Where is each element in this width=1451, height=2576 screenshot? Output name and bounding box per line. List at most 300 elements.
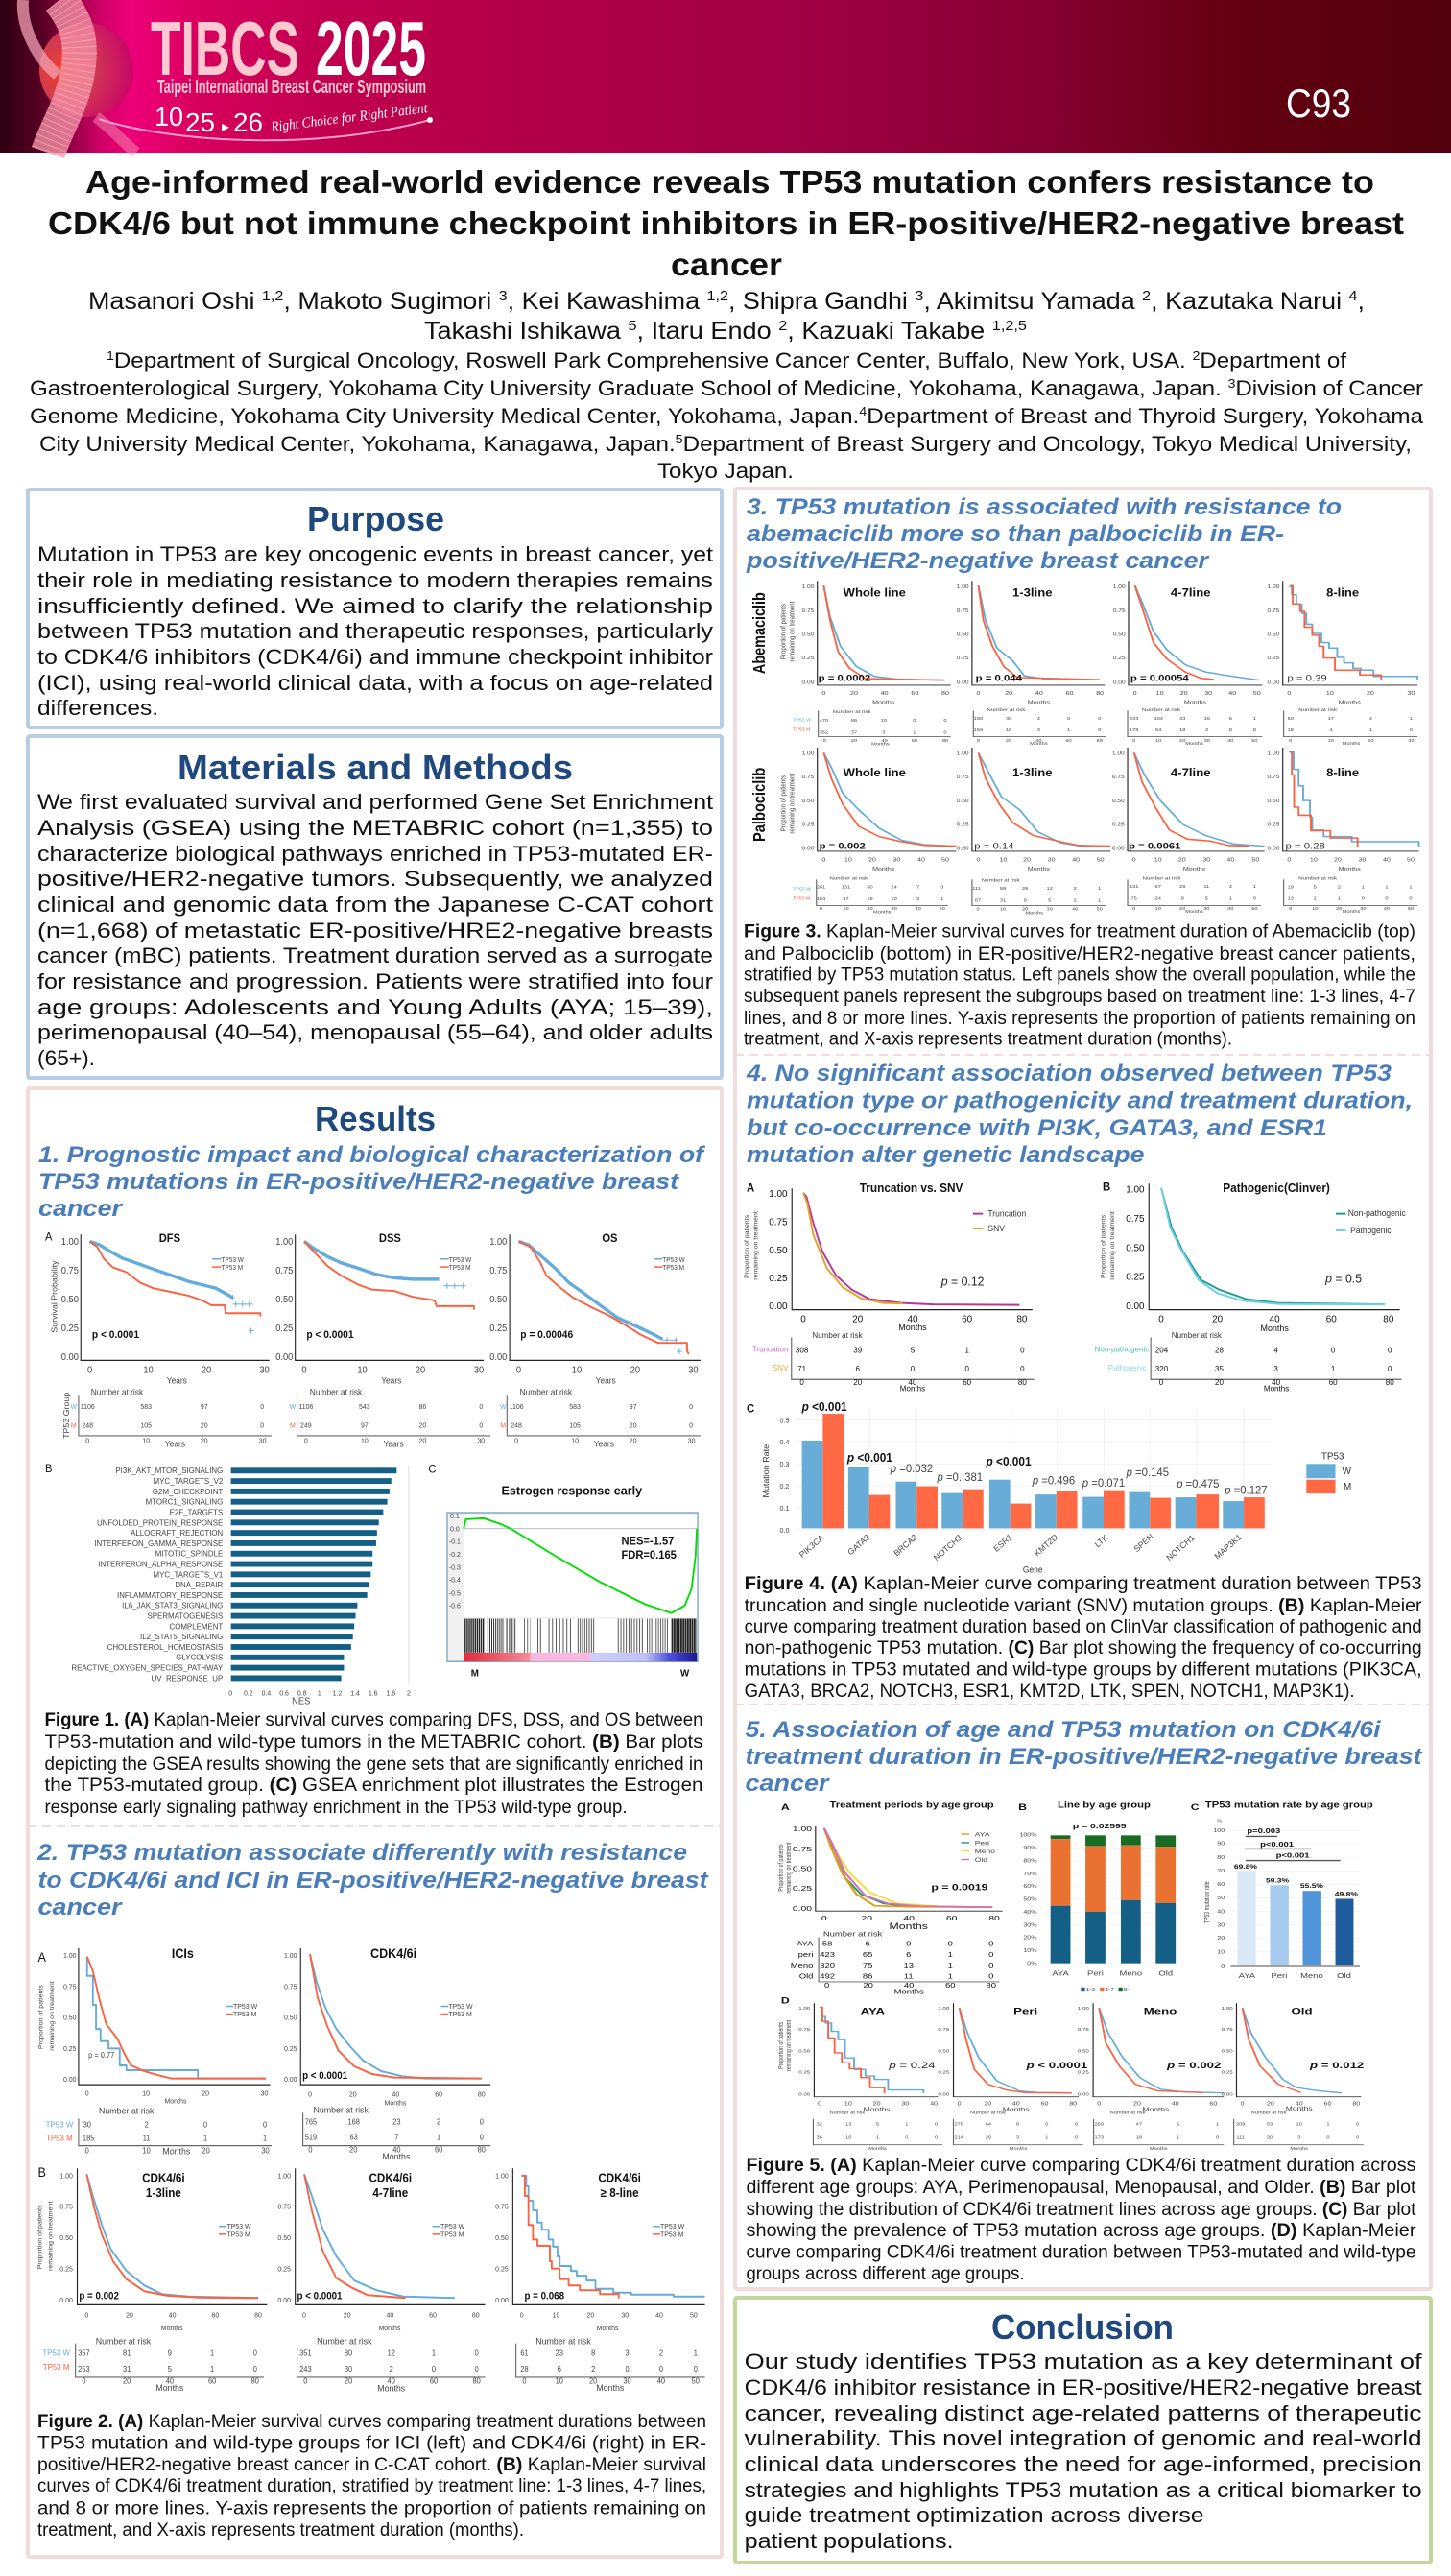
figure 1B: GSEA bar chart: SPERMATOGENESIS	[148, 1611, 224, 1621]
figure 5A: treatment periods by age: 0.00	[793, 1904, 812, 1913]
text: conclusion body: clinical data underscores the need for age-informed, precision	[745, 2452, 1422, 2476]
figure 5D: Meno: Months	[1150, 2147, 1168, 2152]
figure 4C: co-mutation bar chart: p =0. 381	[937, 1471, 983, 1484]
figure 5D: Meno: 259	[1095, 2122, 1104, 2127]
figure 5D: Old: 0	[1241, 2101, 1245, 2107]
figure 5D: AYA: 0.50	[798, 2049, 810, 2054]
figure 3: abemaciclib 8 line: 4	[1329, 728, 1333, 733]
figure 2B: CDK4/6i 8+ line: 3	[625, 2349, 630, 2358]
figure 5A: treatment periods by age: Meno	[975, 1848, 995, 1855]
figure 3: abemaciclib 1-3 line: 0.75	[957, 608, 969, 614]
figure 5D: Meno: 0.50	[1078, 2049, 1089, 2054]
figure 5D: Peri: 80	[1069, 2101, 1078, 2107]
figure 4C: co-mutation bar chart: ESR1	[991, 1532, 1014, 1554]
figure 2B: CDK4/6i 1-3 line: 60	[208, 2376, 216, 2386]
figure 3: abemaciclib 4-7 line: p = 0.00054	[1130, 674, 1189, 683]
figure 2A: ICIs: Number at risk	[99, 2106, 155, 2115]
figure 4B: pathogenic: 80	[1386, 1378, 1394, 1387]
icon: globe	[39, 23, 133, 117]
figure 5B: line by age group: 20%	[1023, 1935, 1037, 1941]
figure 2A: CDK4/6i: CDK4/6i	[370, 1946, 416, 1961]
figure 3: palbociclib 1-3 line: 1-3line	[1012, 767, 1053, 779]
figure 1A: DFS survival: 10	[143, 1365, 154, 1376]
figure 3: abemaciclib 8 line: 0.25	[1268, 656, 1280, 661]
figure 3	[749, 581, 1419, 916]
figure 4A: truncation vs SNV: 20	[852, 1314, 864, 1325]
figure 2A: ICIs: TP53 W	[46, 2120, 73, 2130]
figure 1A: OS survival: 10	[571, 1437, 579, 1444]
figure 4C: co-mutation bar chart: MAP3K1	[1213, 1532, 1244, 1562]
figure 1A: DFS survival: TP53 Group	[61, 1393, 71, 1439]
figure 5C: TP53 mutation rate by age: 49.8%	[1335, 1891, 1358, 1897]
figure 4C legend: W	[1343, 1467, 1351, 1477]
figure 1A: DFS survival: DFS	[159, 1233, 180, 1245]
figure 5A: treatment periods by age: 0	[824, 1982, 830, 1989]
figure 2 caption: Figure 2. (A) Kaplan-Meier survival curves comparing treatment durations between	[37, 2412, 706, 2432]
figure 2A: ICIs: 30	[83, 2120, 91, 2130]
figure 5D: AYA: Months	[864, 2106, 891, 2113]
figure 2B: CDK4/6i 4-7 line: 351	[299, 2349, 312, 2358]
figure 3: abemaciclib 1-3 line: 20	[1005, 690, 1013, 697]
figure 1A: DSS survival: 0	[479, 1403, 483, 1411]
authors: , Akimitsu Yamada	[923, 288, 1142, 315]
figure 5C: TP53 mutation rate by age: 50	[1217, 1896, 1225, 1901]
authors: , Itaru Endo	[637, 318, 778, 345]
figure 4 caption: GATA3, BRCA2, NOTCH3, ESR1, KMT2D, LTK, SPEN, NOTCH1, MAP3K1).	[745, 1682, 1355, 1702]
section 3 heading: abemaciclib more so than palbociclib in ER-	[747, 521, 1284, 547]
affiliations: 3	[1227, 376, 1235, 391]
title: CDK4/6 but not immune checkpoint inhibitors in ER-positive/HER2-negative breast	[48, 205, 1404, 241]
figure 3: palbociclib 4-7 line: 20	[1179, 906, 1186, 912]
figure 4A: truncation vs SNV: 60	[963, 1378, 972, 1387]
figure 2A: CDK4/6i: 0.25	[284, 2044, 297, 2053]
figure 5A: treatment periods by age: 1	[948, 1962, 953, 1969]
figure 1B: GSEA bar chart: 1.4	[350, 1689, 360, 1698]
figure 5B: line by age group: Line by age group	[1058, 1801, 1151, 1810]
figure 5D: Old: 53	[1267, 2122, 1273, 2127]
figure 5D: Meno: Number at risk	[1110, 2111, 1146, 2115]
figure 2B: CDK4/6i 1-3 line: 1	[210, 2365, 214, 2373]
heading: conclusion: Conclusion	[991, 2307, 1174, 2347]
figure 3: abemaciclib 8 line: 30	[1408, 690, 1415, 697]
figure 5A: treatment periods by age: peri	[798, 1951, 814, 1959]
section 5 heading: cancer	[745, 1771, 830, 1797]
figure 3: palbociclib 1-3 line: Months	[1025, 911, 1043, 916]
figure 2A: ICIs: p = 0.77	[88, 2051, 114, 2060]
figure 5D: Peri: 0.00	[938, 2092, 949, 2097]
figure 1A: DFS survival: TP53 M	[221, 1265, 244, 1272]
figure 2B: CDK4/6i 1-3 line: Proportion of patients	[36, 2205, 43, 2269]
figure 3: abemaciclib whole line: 0.75	[802, 608, 815, 614]
text: purpose body: Mutation in TP53 are key oncogenic events in breast cancer, yet	[37, 542, 713, 566]
figure 1A: DSS survival: 543	[359, 1403, 370, 1411]
figure 1C: GSEA enrichment plot: NES=-1.57	[621, 1536, 674, 1547]
text: conclusion body: patient populations.	[745, 2529, 954, 2553]
figure 2B: CDK4/6i 1-3 line: 40	[166, 2376, 174, 2386]
figure 2B: CDK4/6i 8+ line: 0.50	[495, 2233, 509, 2242]
figure 3: palbociclib whole line: p = 0.002	[820, 843, 866, 851]
figure 5D: Meno: 18	[1136, 2135, 1142, 2140]
figure 1A: OS survival: M	[500, 1421, 506, 1430]
figure 3: palbociclib whole line: 7	[916, 885, 919, 890]
figure 5A: treatment periods by age: 6	[866, 1941, 870, 1947]
figure 3: palbociclib whole line: 1	[940, 896, 943, 902]
figure 5B: line by age group: 30%	[1023, 1922, 1037, 1928]
figure 3: palbociclib 8 line: 1	[1338, 896, 1341, 901]
figure 3: abemaciclib 4-7 line: 10	[1156, 690, 1164, 697]
figure 3: palbociclib 4-7 line: 0.75	[1112, 775, 1125, 780]
figure 4C: co-mutation bar chart: C	[747, 1402, 755, 1416]
figure 3: palbociclib whole line: Number at risk	[829, 876, 868, 881]
figure 5C: TP53 mutation rate by age: 80	[1217, 1855, 1225, 1860]
figure 3: palbociclib 1-3 line: 40	[1072, 857, 1081, 863]
figure 5A: treatment periods by age: Proportion of patients	[777, 1845, 785, 1892]
figure 4C legend: M	[1344, 1482, 1351, 1492]
figure 3: palbociclib 8 line: 19	[1288, 885, 1294, 890]
figure 2A: ICIs: TP53 W	[233, 2002, 257, 2011]
figure 5D: AYA: 1	[876, 2135, 879, 2140]
figure 2B: CDK4/6i 4-7 line: 80	[472, 2310, 480, 2320]
figure 2B: CDK4/6i 4-7 line: 30	[345, 2365, 352, 2373]
figure 1A: DFS survival: 30	[259, 1437, 267, 1444]
figure 3: abemaciclib whole line: TP53 W	[793, 718, 812, 723]
figure 3: palbociclib 8 line: 10	[1310, 857, 1318, 863]
figure 5D: AYA: AYA	[861, 2007, 886, 2016]
figure 2B: CDK4/6i 1-3 line: 0	[82, 2376, 86, 2386]
figure 2A: CDK4/6i: 80	[478, 2089, 486, 2099]
figure 4B: pathogenic: 80	[1383, 1314, 1394, 1325]
figure 3: abemaciclib whole line: 0	[943, 718, 947, 724]
figure 3: palbociclib 1-3 line: 20	[1022, 907, 1028, 912]
figure 2B: CDK4/6i 1-3 line: 357	[78, 2349, 90, 2358]
figure 2B: CDK4/6i 4-7 line: 2	[390, 2365, 393, 2373]
figure 5D: AYA: 32	[816, 2122, 822, 2127]
figure 5B: line by age group: Peri	[1087, 1970, 1104, 1977]
figure 1A: DFS survival: 0	[260, 1421, 264, 1430]
figure 1A: DFS survival: 0.25	[61, 1324, 79, 1334]
affiliations	[30, 348, 1424, 483]
figure 2A: ICIs: 1.00	[63, 1951, 77, 1960]
figure 4 caption: mutations in TP53 mutated and wild-type groups by different mutations (PIK3CA,	[745, 1660, 1422, 1681]
figure 4C: co-mutation bar chart: p =0.032	[890, 1463, 933, 1475]
figure 5D: Old: 0	[1326, 2135, 1330, 2140]
figure 2B: CDK4/6i 8+ line: 50	[690, 2310, 698, 2320]
figure 5D: Old: 0.25	[1222, 2070, 1233, 2075]
figure 3: abemaciclib whole line: remaining on treatment	[789, 602, 797, 662]
figure 2B: CDK4/6i 1-3 line: Months	[161, 2324, 183, 2332]
figure 3: palbociclib 8 line: 0	[1289, 906, 1292, 912]
figure 5A: treatment periods by age: 0	[988, 1941, 994, 1947]
figure 3: abemaciclib 4-7 line: 0	[1132, 738, 1135, 744]
figure 3: palbociclib 1-3 line: 10	[1000, 857, 1008, 863]
affiliations: City University Medical Center, Yokohama, Kanagawa, Japan.	[39, 432, 618, 456]
figure 4A: truncation vs SNV: 80	[1016, 1314, 1028, 1325]
figure 2B: CDK4/6i 8+ line: 28	[520, 2365, 529, 2373]
figure 5A: treatment periods by age: Old	[975, 1856, 987, 1864]
figure 5D: Meno: 0	[1097, 2101, 1102, 2107]
figure 3: abemaciclib 1-3 line: 0.50	[957, 632, 969, 637]
figure 5A: treatment periods by age: A	[781, 1803, 790, 1813]
figure 2B: CDK4/6i 4-7 line: 0	[302, 2310, 306, 2320]
figure 2B: CDK4/6i 1-3 line: 20	[123, 2376, 131, 2386]
figure 4C: co-mutation bar chart: BRCA2	[892, 1532, 919, 1558]
figure 5B: line by age group: 70%	[1023, 1872, 1037, 1877]
title: Age-informed real-world evidence reveals TP53 mutation confers resistance to	[85, 164, 1374, 200]
figure 5D: AYA: 0	[935, 2122, 938, 2127]
figure 2B: CDK4/6i 1-3 line: 253	[78, 2365, 90, 2373]
figure 5 caption	[747, 2156, 1416, 2284]
figure 5D: AYA: Number at risk	[829, 2111, 866, 2115]
figure 3: abemaciclib 4-7 line: 18	[1179, 728, 1186, 733]
figure 5A: treatment periods by age: 320	[820, 1962, 835, 1969]
figure 2A: ICIs: 10	[142, 2088, 150, 2098]
figure 3: palbociclib 4-7 line: 9	[1181, 896, 1184, 901]
figure 4B: pathogenic: 0.75	[1126, 1214, 1145, 1225]
affiliations: 1	[107, 348, 114, 363]
figure 3: palbociclib 4-7 line: p = 0.0061	[1129, 843, 1181, 851]
figure 1B: GSEA bar chart: MYC_TARGETS_V2	[153, 1477, 224, 1486]
figure 4A: truncation vs SNV: 20	[853, 1378, 863, 1387]
figure 5D: Peri: 0	[958, 2101, 962, 2107]
figure 2B: CDK4/6i 4-7 line: 60	[430, 2376, 438, 2386]
figure 3: palbociclib 1-3 line: 111	[972, 887, 981, 892]
figure 3: palbociclib 1-3 line: 29	[1022, 887, 1028, 892]
figure 1A: DFS survival: p < 0.0001	[92, 1329, 139, 1341]
figure 5B: line by age group: 80%	[1023, 1858, 1037, 1864]
figure 4B: pathogenic: 20	[1212, 1314, 1223, 1325]
figure 2B: CDK4/6i 8+ line: 8	[591, 2349, 595, 2358]
figure 5D: Old: 20	[1267, 2135, 1273, 2140]
figure 3: abemaciclib 8 line: Months	[1339, 700, 1361, 705]
text: purpose body: differences.	[37, 696, 158, 720]
figure 2A: CDK4/6i: 2	[437, 2117, 440, 2127]
figure 3: palbociclib 4-7 line: 20	[1178, 857, 1186, 863]
figure 1B: GSEA bar chart: 1.6	[369, 1689, 378, 1698]
figure 1C: GSEA enrichment plot: -0.3	[449, 1563, 461, 1571]
figure 5A: treatment periods by age: 0	[988, 1951, 994, 1959]
figure 3: palbociclib whole line: 0.50	[802, 799, 815, 804]
figure 5D: Meno: 173	[1095, 2135, 1104, 2140]
figure 3: abemaciclib 1-3 line: 80	[1097, 738, 1103, 744]
figure 2B: CDK4/6i 8+ line: 40	[657, 2376, 665, 2386]
figure 3: abemaciclib whole line: 352	[820, 730, 828, 735]
figure 3: palbociclib 8 line: 0.50	[1268, 799, 1280, 804]
figure 2A: CDK4/6i: 40	[392, 2145, 400, 2155]
figure 4A: truncation vs SNV: 308	[796, 1346, 809, 1354]
figure 5B legend	[1081, 1988, 1130, 1992]
figure 3: palbociclib 1-3 line	[957, 748, 1110, 916]
figure 3: abemaciclib 1-3 line: 0	[1098, 728, 1101, 733]
figure 4A: truncation vs SNV: 71	[797, 1365, 806, 1373]
figure 1A: DSS survival: 10	[361, 1437, 369, 1444]
figure 2A: CDK4/6i: 0	[480, 2133, 484, 2142]
figure 3: abemaciclib 4-7 line: 233	[1130, 716, 1139, 722]
figure 4B: pathogenic: Months	[1260, 1324, 1289, 1333]
figure 1B: GSEA bar chart: MTORC1_SIGNALING	[146, 1497, 223, 1507]
figure 2A: ICIs: 0.00	[63, 2075, 77, 2084]
figure 2B: CDK4/6i 8+ line: 2	[591, 2365, 595, 2373]
figure 2A: CDK4/6i: 0	[308, 2089, 312, 2099]
authors: 1,2,5	[992, 318, 1027, 334]
figure 1A: DSS survival	[275, 1233, 490, 1449]
text: purpose body: to CDK4/6 inhibitors (CDK4/6i) and immune checkpoint inhibitor	[37, 645, 713, 669]
figure 3: palbociclib 1-3 line: 10	[1000, 907, 1006, 912]
figure 1A: OS survival: 0.75	[489, 1266, 507, 1276]
figure 1B: GSEA bar chart: UV_RESPONSE_UP	[152, 1674, 223, 1682]
figure 2 caption: TP53 mutation and wild-type groups for ICI (left) and CDK4/6i (right) in ER-	[37, 2434, 706, 2453]
figure 2B: CDK4/6i 8+ line: TP53 M	[660, 2230, 683, 2238]
figure 3: abemaciclib whole line: 40	[881, 690, 889, 697]
figure 3: palbociclib whole line: 40	[915, 906, 921, 912]
figure 2B: CDK4/6i 4-7 line: 0.50	[277, 2233, 291, 2242]
figure 3: palbociclib 8 line: 20	[1334, 857, 1342, 863]
authors: , Kazutaka Narui	[1151, 288, 1349, 315]
figure 5A: treatment periods by age: 60	[946, 1915, 957, 1922]
figure 2B: CDK4/6i 1-3 line: 5	[168, 2365, 172, 2373]
figure 1C: GSEA enrichment plot: M	[471, 1668, 479, 1680]
figure 5D: Meno: 0.00	[1078, 2092, 1089, 2097]
figure 3: palbociclib 1-3 line: 0	[976, 907, 980, 912]
figure 3: abemaciclib 4-7 line: 0.00	[1113, 680, 1126, 685]
figure 3: palbociclib 1-3 line: 5	[1048, 898, 1051, 903]
figure 5A: treatment periods by age: 1.00	[793, 1825, 812, 1833]
figure 3: abemaciclib 8 line	[1268, 581, 1417, 747]
figure 3: abemaciclib whole line: 20	[850, 690, 858, 697]
figure 2B: CDK4/6i 1-3 line: TP53 M	[43, 2363, 70, 2372]
figure 2A: CDK4/6i: 60	[435, 2089, 442, 2099]
figure 2B: CDK4/6i 4-7 line: 40	[386, 2310, 393, 2320]
title	[48, 164, 1404, 282]
figure 2B: CDK4/6i 4-7 line: TP53 M	[440, 2230, 464, 2238]
figure 2A: CDK4/6i: Months	[385, 2098, 407, 2107]
figure 2A: ICIs: 2	[145, 2120, 149, 2130]
figure 2A: CDK4/6i: TP53 M	[448, 2010, 472, 2018]
figure 5D: Old: 1	[1326, 2122, 1330, 2127]
figure 5D: Peri	[938, 2003, 1088, 2152]
authors: 4	[1349, 288, 1358, 304]
figure 1A: DFS survival: 97	[201, 1403, 208, 1411]
figure 1A: DSS survival: 0	[304, 1437, 308, 1444]
figure 3: abemaciclib 8 line: 8-line	[1326, 586, 1359, 599]
figure 2	[36, 1946, 705, 2394]
figure 1B: GSEA bar chart: PI3K_AKT_MTOR_SIGNALING	[115, 1467, 223, 1475]
header banner: ▸	[222, 119, 229, 135]
figure 2B: CDK4/6i 1-3 line: 0.50	[59, 2233, 73, 2242]
figure 4B: pathogenic: Proportion of patients	[1101, 1214, 1106, 1278]
section 5 heading	[745, 1717, 1423, 1797]
panel: materials and methods	[28, 736, 722, 1078]
figure 5 caption: showing the distribution of CDK4/6i treatment lines across age groups. (C) Bar plot	[747, 2200, 1416, 2220]
figure 3: abemaciclib 4-7 line: 54	[1155, 728, 1161, 733]
poster number: C93	[1286, 81, 1351, 126]
figure 2A: CDK4/6i: TP53 W	[448, 2002, 473, 2011]
figure 3: palbociclib 8 line: Months	[1339, 867, 1361, 872]
figure 5C: TP53 mutation rate by age: 55.5%	[1300, 1882, 1323, 1890]
figure 4 caption	[745, 1574, 1422, 1702]
figure 1A: OS survival: TP53 M	[662, 1265, 685, 1272]
figure 4B: pathogenic: p = 0.5	[1324, 1272, 1362, 1285]
figure 3: abemaciclib whole line: Proportion of patients	[780, 604, 788, 659]
figure 5D: Peri: 0.25	[938, 2070, 949, 2075]
figure 3: palbociclib whole line: Whole line	[844, 767, 906, 779]
authors: ,	[1358, 288, 1365, 315]
figure 1A: OS survival: Years	[594, 1440, 614, 1449]
figure 5D: Meno: 0.25	[1078, 2070, 1089, 2075]
figure 3: palbociclib 8 line: 1	[1362, 885, 1365, 890]
section 4 heading: mutation alter genetic landscape	[747, 1142, 1144, 1168]
figure 3: palbociclib whole line: 0.75	[802, 775, 815, 780]
figure 1A: DFS survival: 0.75	[61, 1266, 79, 1276]
section 2 heading: 2. TP53 mutation associate differently with resistance	[36, 1840, 687, 1866]
figure 5C: TP53 mutation rate by age: TP53 mutation rate by age group	[1205, 1801, 1373, 1810]
figure 2B: CDK4/6i 1-3 line: Number at risk	[96, 2336, 152, 2347]
figure 2B: CDK4/6i 1-3 line: 0.00	[59, 2296, 73, 2304]
figure 1A: DFS survival: A	[45, 1231, 53, 1244]
figure 5C: TP53 mutation rate by age: Peri	[1272, 1972, 1287, 1979]
figure 1A: DSS survival: M	[290, 1421, 296, 1430]
figure 1A: DFS survival: 0.50	[61, 1295, 79, 1305]
figure 4B: pathogenic: 204	[1155, 1346, 1169, 1354]
figure 2A: ICIs: 20	[202, 2088, 209, 2098]
figure 1A: OS survival: 0	[514, 1437, 518, 1444]
figure 3: palbociclib whole line: 20	[868, 857, 876, 863]
figure 3: abemaciclib 8 line: 10	[1326, 690, 1334, 697]
section 4 heading: but co-occurrence with PI3K, GATA3, and ESR1	[747, 1115, 1327, 1141]
figure 5D: Meno: 5	[1177, 2122, 1179, 2127]
figure 2A: CDK4/6i: 0	[308, 2145, 313, 2155]
text: methods body: perimenopausal (40–54), menopausal (55–64), and older adults	[37, 1020, 713, 1044]
figure 2B: CDK4/6i 8+ line: 1	[694, 2349, 698, 2358]
figure 1 caption: TP53-mutation and wild-type tumors in the METABRIC cohort. (B) Bar plots	[44, 1732, 702, 1753]
text: methods body: positive/HER2-negative tumors. Subsequently, we analyzed	[37, 867, 713, 891]
figure 5D: Peri: 0	[1045, 2122, 1049, 2127]
figure 1A: OS survival: 30	[688, 1365, 699, 1376]
figure 1A: DFS survival: Survival Probability	[50, 1260, 59, 1333]
figure 3: palbociclib whole line: 30	[891, 906, 897, 912]
figure 3: palbociclib 4-7 line: 10	[1155, 906, 1161, 912]
figure 1B: GSEA bar chart: 1.8	[386, 1689, 395, 1698]
figure 2B: CDK4/6i 4-7 line: 20	[345, 2376, 352, 2386]
figure 5A: treatment periods by age: 1	[948, 1973, 953, 1980]
figure 2B: CDK4/6i 8+ line: Number at risk	[535, 2336, 591, 2347]
figure 5C: TP53 mutation rate by age: 59.3%	[1266, 1877, 1290, 1884]
figure 2B: CDK4/6i 8+ line: 10	[553, 2310, 559, 2320]
figure 5D: AYA: 40	[930, 2101, 939, 2107]
figure 1C: GSEA enrichment plot: -0.6	[449, 1603, 461, 1610]
figure 3: palbociclib 8 line: 1	[1409, 885, 1413, 890]
figure 3: abemaciclib 1-3 line: 1-3line	[1012, 586, 1053, 599]
text: conclusion body: Our study identifies TP53 mutation as a key determinant of	[745, 2349, 1423, 2373]
figure 2B: CDK4/6i 8+ line: 30	[623, 2376, 631, 2386]
figure 5C: TP53 mutation rate by age	[1191, 1801, 1373, 1979]
figure 4A: truncation vs SNV: SNV	[773, 1364, 789, 1372]
figure 3: palbociclib 8 line: 30	[1358, 857, 1367, 863]
figure 2A: CDK4/6i: 20	[349, 2089, 357, 2099]
figure 2B: CDK4/6i 8+ line: Months	[597, 2324, 619, 2332]
figure 1A: OS survival: 105	[569, 1421, 581, 1430]
figure 2B: CDK4/6i 4-7 line: Months	[377, 2383, 406, 2394]
figure 3 caption: lines, and 8 or more lines. Y-axis represents the proportion of patients remaining on	[744, 1009, 1415, 1029]
figure 3: palbociclib 4-7 line: 0.50	[1112, 799, 1125, 804]
figure 2B: CDK4/6i 8+ line: 20	[586, 2310, 594, 2320]
figure 4C: co-mutation bar chart: p =0.071	[1082, 1477, 1125, 1490]
figure 5A: treatment periods by age: 492	[820, 1973, 835, 1980]
figure 4B: pathogenic: 1.00	[1126, 1184, 1145, 1195]
figure 1 caption: depicting the GSEA results showing the gene sets that are significantly enriched in	[44, 1754, 702, 1775]
figure 4A: truncation vs SNV: 80	[1018, 1378, 1027, 1387]
authors: , Kazuaki Takabe	[787, 318, 992, 345]
figure 4A: truncation vs SNV: Truncation vs. SNV	[860, 1181, 963, 1195]
